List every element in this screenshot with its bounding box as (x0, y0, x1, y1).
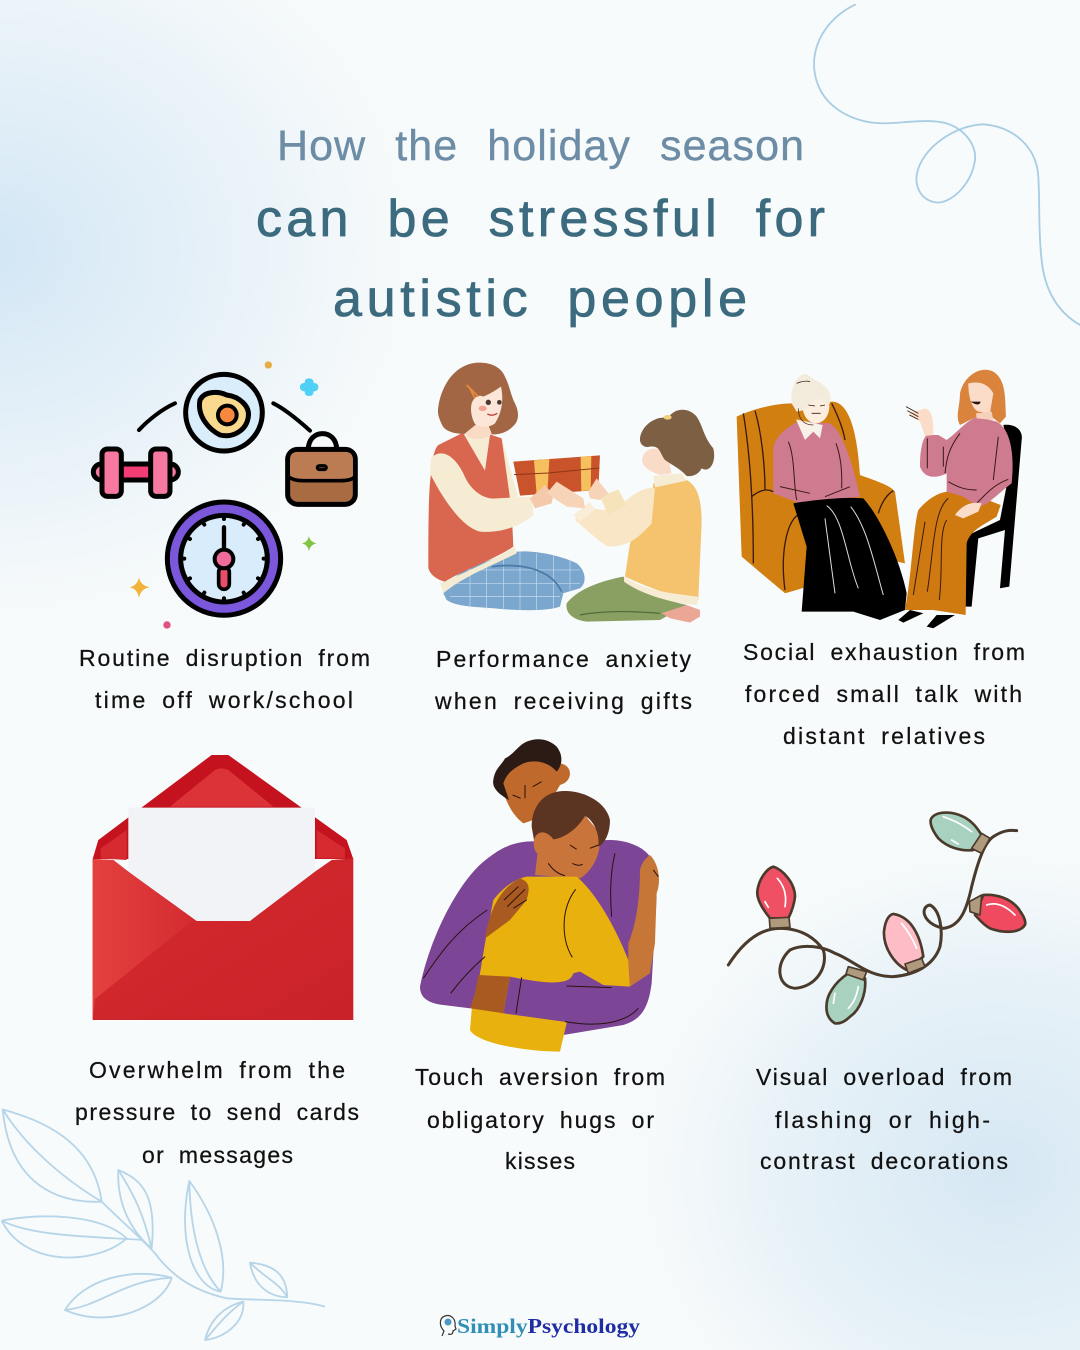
panel: cards and messages (75, 755, 359, 1168)
panel: social exhaustion (737, 370, 1025, 749)
title line 1: How the holiday season (277, 122, 804, 170)
caption: touch aversion (415, 1064, 665, 1174)
caption: routine disruption (79, 645, 370, 713)
panel: touch aversion (415, 739, 665, 1174)
illustration: red envelope with white card (93, 755, 353, 1020)
caption: touch aversion: Touch aversion from (415, 1064, 665, 1090)
caption: social exhaustion: forced small talk with (745, 681, 1022, 707)
caption: performance anxiety: when receiving gifts (434, 688, 692, 714)
caption: visual overload (756, 1064, 1012, 1174)
title line 3: autistic people (333, 270, 747, 328)
icon: daily routine clock, egg, dumbbell, briefcase (93, 361, 355, 629)
caption: social exhaustion: Social exhaustion from (743, 639, 1025, 665)
illustration: elderly woman and young woman talking (737, 370, 1022, 628)
illustration: string of holiday lights (728, 813, 1025, 1023)
caption: visual overload: Visual overload from (756, 1064, 1012, 1090)
caption: cards and messages: pressure to send cards (75, 1099, 359, 1125)
caption: visual overload: contrast decorations (760, 1148, 1008, 1174)
caption: performance anxiety (434, 646, 692, 714)
caption: social exhaustion: distant relatives (783, 723, 985, 749)
decorative leaf branch (2, 1109, 325, 1340)
logo: Simply Psychology (440, 1314, 641, 1338)
title line 2: can be stressful for (256, 190, 825, 248)
panel: routine disruption (79, 361, 370, 713)
caption: routine disruption: time off work/school (95, 687, 353, 713)
caption: routine disruption: Routine disruption from (79, 645, 370, 671)
caption: touch aversion: kisses (505, 1148, 575, 1174)
caption: visual overload: flashing or high- (775, 1107, 990, 1133)
caption: social exhaustion (743, 639, 1025, 749)
illustration: woman giving gift to child (428, 363, 714, 623)
caption: touch aversion: obligatory hugs or (427, 1107, 654, 1133)
caption: cards and messages: or messages (142, 1142, 293, 1168)
panel: visual overload (728, 813, 1025, 1174)
caption: cards and messages: Overwhelm from the (89, 1057, 345, 1083)
illustration: two people hugging (420, 739, 659, 1052)
logo wordmark: Simply Psychology (457, 1314, 641, 1338)
decorative curl line (814, 5, 1080, 325)
icon: head silhouette (440, 1316, 456, 1336)
caption: cards and messages (75, 1057, 359, 1168)
caption: performance anxiety: Performance anxiety (436, 646, 692, 672)
panel: performance anxiety (428, 363, 714, 714)
title (256, 122, 825, 328)
